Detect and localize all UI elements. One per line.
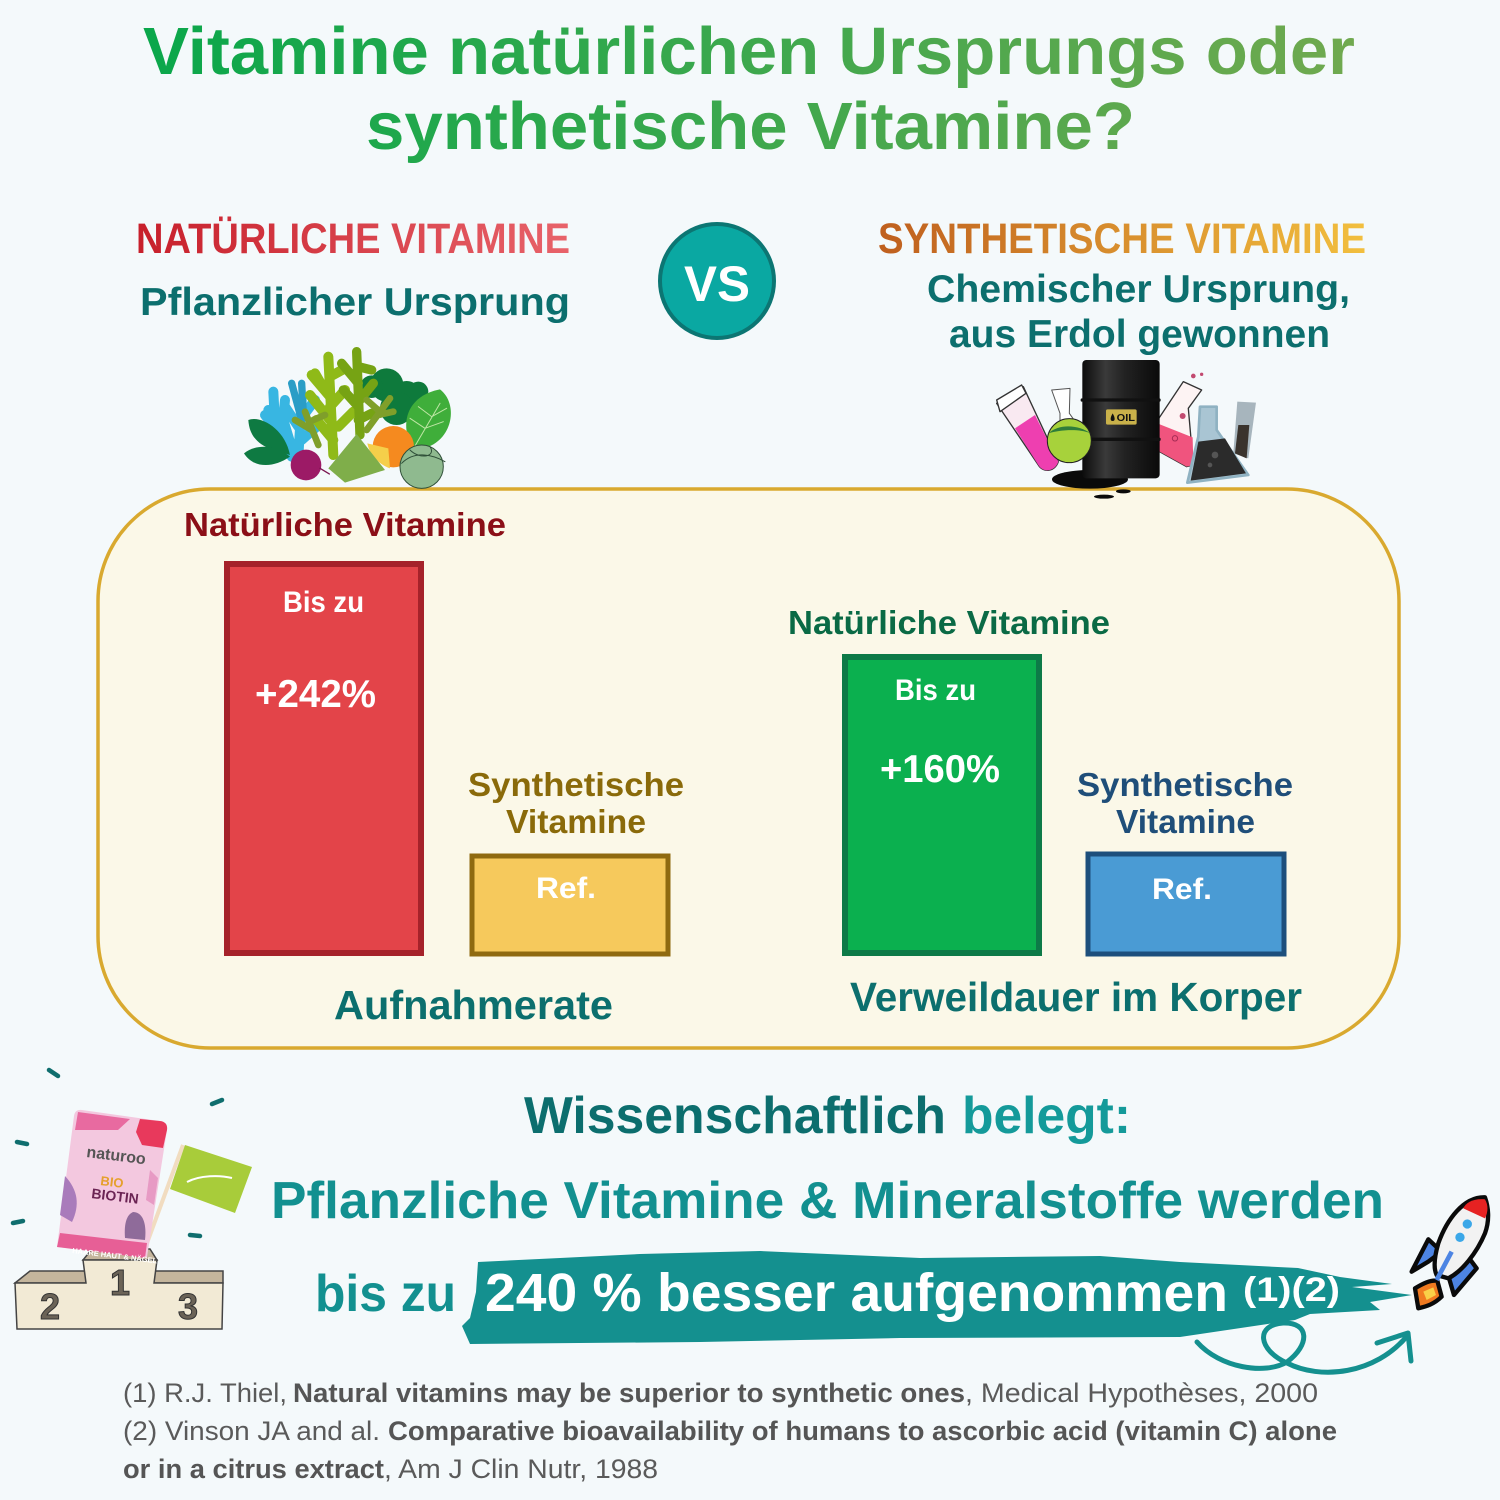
- bar: synthetic retention: Ref.: [1152, 873, 1212, 906]
- bar: natural absorption: Bis zu: [283, 586, 364, 619]
- text: up to: bis zu: [315, 1265, 456, 1323]
- label: synthetic vitamins blue: Synthetische: [1077, 766, 1293, 803]
- icon: product pouch: naturoo: [86, 1144, 147, 1168]
- label: natural vitamins green: Natürliche Vitamine: [788, 604, 1110, 641]
- icon: product pouch: HAARE HAUT & NÄGEL: [72, 1246, 158, 1265]
- icon: oil drops: [1094, 489, 1131, 499]
- label: synthetic vitamins blue: Vitamine: [1116, 803, 1255, 840]
- heading: scientifically proven: Wissenschaftlich: [524, 1087, 946, 1145]
- icon: pink test tube: [997, 385, 1058, 470]
- bar: natural absorption: +242%: [255, 673, 376, 716]
- icon: barrel: OIL: [1117, 413, 1135, 424]
- icon: oil barrel and flasks: [997, 360, 1256, 499]
- icon: oil spill: [1052, 470, 1128, 489]
- vs badge: VS: [684, 256, 750, 312]
- highlighted claim: (1)(2): [1243, 1271, 1340, 1309]
- decorative dashes: [13, 1070, 222, 1236]
- footnotes: [123, 1378, 1337, 1484]
- bar: synthetic absorption: Ref.: [536, 872, 596, 905]
- text: plant vitamins: Pflanzliche Vitamine & Mineralstoffe werden: [271, 1172, 1384, 1230]
- heading: natural vitamins: NATÜRLICHE VITAMINE: [136, 215, 570, 263]
- label: synthetic vitamins ochre: [468, 766, 684, 840]
- heading: synthetic vitamins: Chemischer Ursprung,: [927, 268, 1350, 311]
- icon: podium: 2: [40, 1286, 60, 1327]
- heading: scientifically proven: belegt:: [962, 1087, 1131, 1145]
- icon: black flask: [1187, 407, 1248, 483]
- heading: synthetic vitamins: SYNTHETISCHE VITAMINE: [878, 215, 1366, 263]
- icon: plants and vegetables: [244, 352, 451, 488]
- bar: natural absorption: [227, 564, 421, 953]
- heading: natural vitamins: [136, 215, 570, 324]
- bar: synthetic absorption: [472, 856, 668, 954]
- icon: podium: [15, 1249, 223, 1329]
- label: synthetic vitamins blue: [1077, 766, 1293, 840]
- bar: natural retention: [845, 657, 1039, 953]
- arrow: swoosh: [1197, 1323, 1411, 1372]
- title: [143, 14, 1355, 164]
- footnotes: Comparative bioavailability of humans to ascorbic acid (vitamin C) alone: [388, 1416, 1337, 1446]
- title: synthetische Vitamine?: [366, 89, 1135, 164]
- highlighted claim: 240 % besser aufgenommen: [485, 1263, 1228, 1323]
- icon: flag: [147, 1145, 252, 1243]
- heading: synthetic vitamins: [878, 215, 1366, 356]
- footnotes: (2) Vinson JA and al.: [123, 1416, 380, 1446]
- icon: product pouch: BIO: [100, 1173, 124, 1191]
- icon: test tube gray: [1233, 402, 1256, 458]
- icon: product pouch: BIOTIN: [91, 1185, 140, 1207]
- heading: natural vitamins: Pflanzlicher Ursprung: [140, 281, 570, 324]
- vs badge: [660, 224, 774, 338]
- label: natural vitamins red: Natürliche Vitamine: [184, 506, 506, 543]
- label: synthetic vitamins ochre: Synthetische: [468, 766, 684, 803]
- brush highlight: [462, 1251, 1412, 1344]
- label: synthetic vitamins ochre: Vitamine: [506, 803, 646, 840]
- footnotes: (1) R.J. Thiel,: [123, 1378, 287, 1408]
- bar: synthetic retention: [1088, 854, 1284, 954]
- heading: synthetic vitamins: aus Erdol gewonnen: [949, 313, 1330, 356]
- footnotes: , Medical Hypothèses, 2000: [965, 1378, 1318, 1408]
- footnotes: , Am J Clin Nutr, 1988: [384, 1454, 658, 1484]
- icon: product pouch: [57, 1110, 167, 1265]
- icon: barrel: [1081, 360, 1161, 478]
- axis label: retention time: Verweildauer im Korper: [850, 974, 1302, 1020]
- icon: podium: 1: [110, 1262, 130, 1303]
- icon: product on podium: [13, 1070, 252, 1329]
- icon: podium: 3: [178, 1286, 198, 1327]
- footnotes: or in a citrus extract: [123, 1454, 384, 1484]
- icon: rocket: [1412, 1197, 1488, 1308]
- icon: pink flask: [1157, 373, 1203, 467]
- icon: green round flask: [1047, 388, 1091, 463]
- bar: natural retention: Bis zu: [895, 674, 976, 707]
- bar: natural retention: +160%: [880, 748, 1000, 791]
- footnotes: Natural vitamins may be superior to synthetic ones: [293, 1378, 965, 1408]
- panel: comparison: [98, 489, 1399, 1048]
- axis label: absorption rate: Aufnahmerate: [334, 982, 613, 1028]
- heading: scientifically proven: [524, 1087, 1131, 1145]
- title: Vitamine natürlichen Ursprungs oder: [143, 14, 1355, 89]
